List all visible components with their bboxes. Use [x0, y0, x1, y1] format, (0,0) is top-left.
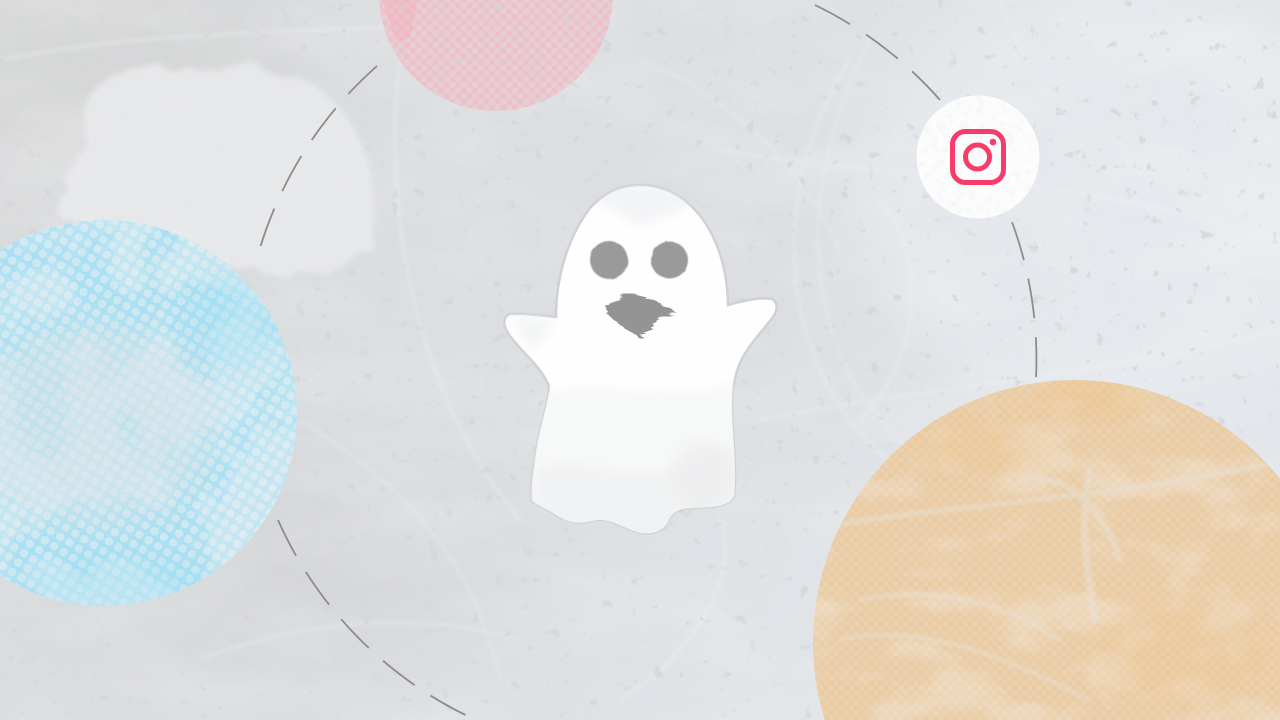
- pale cloud wash: [61, 66, 376, 275]
- icon: instagram: [952, 132, 1004, 182]
- ghost eye: left: [590, 241, 628, 279]
- ghost body: [504, 185, 777, 533]
- planet: blue: [0, 220, 300, 610]
- ghost mouth: [606, 295, 678, 338]
- ghost: [504, 185, 777, 540]
- planet: red: [379, 0, 613, 111]
- instagram badge: [916, 95, 1040, 219]
- badge disc: [916, 96, 1040, 218]
- dashed orbit ring: [260, 5, 1036, 720]
- ghost watercolor shading: [510, 185, 740, 540]
- ghost eye: right: [651, 242, 688, 278]
- planet: orange: [810, 375, 1280, 720]
